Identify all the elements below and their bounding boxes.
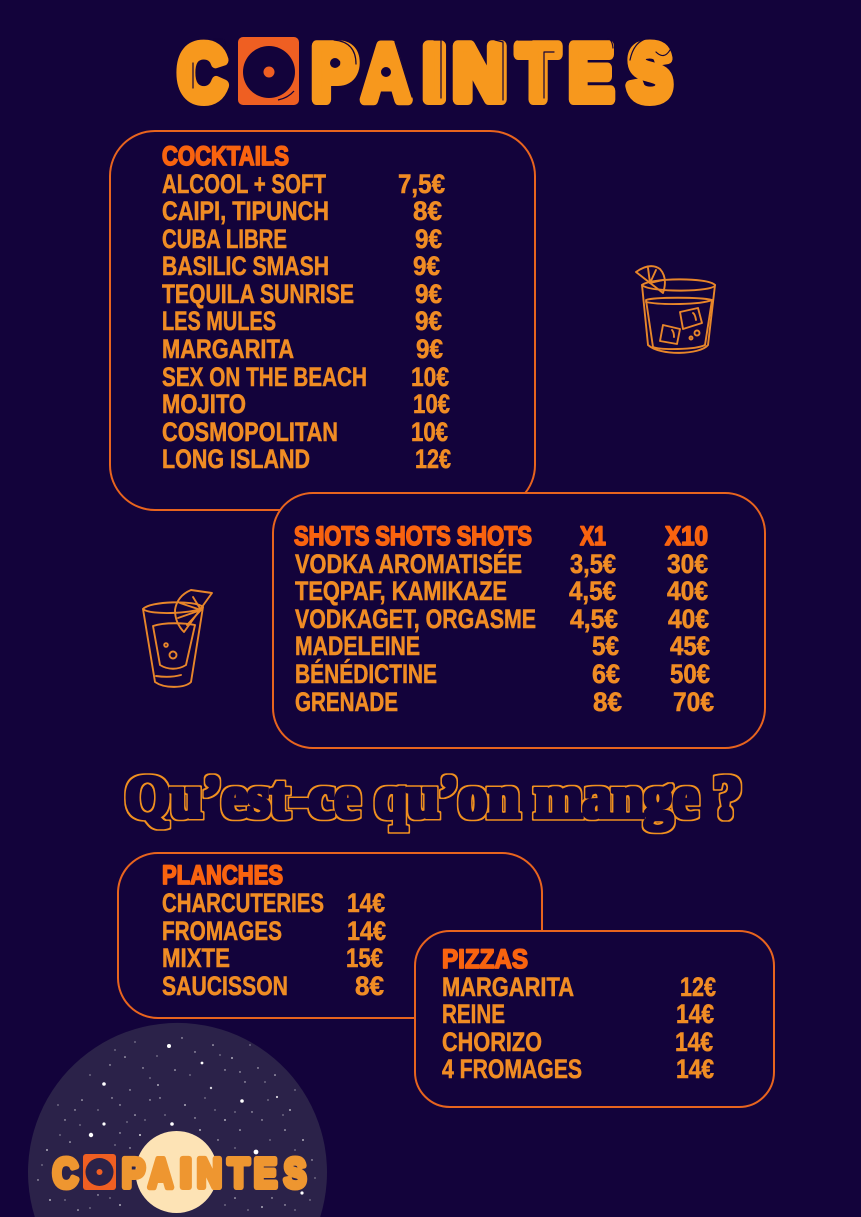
logo: small Copaintes: T	[228, 1151, 249, 1197]
planches prices: 8€	[355, 971, 384, 1001]
cocktail prices: 9€	[415, 279, 442, 309]
logo: Copaintes header: E	[569, 29, 613, 117]
pizza prices: 14€	[676, 999, 714, 1029]
logo: Copaintes header: C	[178, 29, 226, 117]
logo: small Copaintes: C	[53, 1151, 78, 1197]
pizza names: CHORIZO	[442, 1027, 542, 1057]
logo: small Copaintes	[53, 1150, 306, 1197]
shot prices x10: 50€	[670, 659, 710, 689]
moon	[136, 1131, 218, 1213]
cocktail names: CAIPI, TIPUNCH	[162, 196, 329, 226]
cocktail names: SEX ON THE BEACH	[162, 362, 367, 392]
cocktail prices: 9€	[415, 224, 442, 254]
shot prices x10: 30€	[667, 549, 708, 579]
shot prices x1: 6€	[592, 659, 620, 689]
shot names: MADELEINE	[295, 631, 420, 661]
pizza names	[442, 972, 582, 1084]
cocktail prices: 10€	[411, 362, 449, 392]
logo: Copaintes header: S	[628, 30, 672, 117]
cocktail names: TEQUILA SUNRISE	[162, 279, 354, 309]
logo: Copaintes header: N	[453, 30, 507, 117]
cocktail names: COSMOPOLITAN	[162, 417, 338, 447]
logo: Copaintes header: T	[518, 30, 559, 117]
logo: Copaintes header: P	[312, 30, 357, 117]
heading: planches: PLANCHES	[162, 860, 283, 890]
pizza names: 4 FROMAGES	[442, 1054, 582, 1084]
planches names	[162, 888, 324, 1001]
planches names: FROMAGES	[162, 916, 282, 946]
cocktail names: BASILIC SMASH	[162, 251, 329, 281]
shot prices x1: 4,5€	[569, 576, 616, 606]
panel: pizzas	[415, 931, 774, 1107]
heading: shots and column titles: SHOTS SHOTS SHOTS	[294, 521, 532, 551]
pizza names: REINE	[442, 999, 505, 1029]
cocktail prices: 12€	[415, 444, 451, 474]
cocktail prices: 10€	[413, 389, 450, 419]
starry circle badge with small logo	[28, 1023, 327, 1217]
logo: Copaintes header	[178, 29, 672, 117]
planches names: SAUCISSON	[162, 971, 288, 1001]
stars	[37, 1037, 316, 1211]
shot prices x10: 45€	[670, 631, 710, 661]
shot prices x10: 70€	[673, 687, 714, 717]
cocktail names: CUBA LIBRE	[162, 224, 287, 254]
cocktail prices: 10€	[411, 417, 448, 447]
shot prices x10: 40€	[668, 604, 709, 634]
heading: Qu'est-ce qu'on mange ?: Qu’est-ce qu’on mange ?	[125, 764, 742, 830]
panel: shots	[273, 493, 765, 748]
shot prices x10: 40€	[667, 576, 708, 606]
cocktail prices: 7,5€	[398, 169, 445, 199]
logo: small Copaintes: S	[284, 1150, 306, 1196]
icon: cocktail glass with ice and orange slice	[636, 266, 715, 353]
shot prices x1: 4,5€	[570, 604, 618, 634]
cocktail names	[162, 169, 367, 474]
logo: Copaintes header: I	[423, 29, 446, 116]
panel: cocktails	[110, 131, 535, 510]
planches prices: 14€	[347, 888, 385, 918]
cocktail prices: 9€	[416, 334, 443, 364]
cocktail names: MOJITO	[162, 389, 246, 419]
pizza prices: 12€	[680, 972, 716, 1002]
logo: small Copaintes: I	[180, 1150, 192, 1196]
cocktail names: LONG ISLAND	[162, 444, 310, 474]
planches names: MIXTE	[162, 943, 230, 973]
panel: planches	[118, 853, 542, 1018]
planches names: CHARCUTERIES	[162, 888, 324, 918]
pizza names: MARGARITA	[442, 972, 574, 1002]
pizza prices: 14€	[676, 1054, 714, 1084]
planches prices: 15€	[346, 943, 383, 973]
cocktail prices: 8€	[413, 196, 442, 226]
shot names	[295, 549, 536, 717]
logo: small Copaintes: N	[197, 1151, 222, 1197]
cocktail prices: 9€	[415, 306, 442, 336]
cocktail prices	[398, 169, 451, 474]
logo: Copaintes header: A	[363, 30, 410, 117]
pizza prices	[675, 972, 716, 1084]
shot prices x1: 3,5€	[570, 549, 616, 579]
cocktail names: MARGARITA	[162, 334, 294, 364]
shot names: GRENADE	[295, 687, 398, 717]
logo: small Copaintes: E	[254, 1151, 277, 1197]
shot prices x10	[667, 549, 714, 717]
shot prices x1	[569, 549, 622, 717]
logo: small Copaintes: A	[148, 1150, 173, 1196]
heading: shots and column titles: X1	[580, 521, 606, 551]
logo: small Copaintes: P	[122, 1151, 145, 1197]
planches prices: 14€	[347, 916, 386, 946]
heading: pizzas: PIZZAS	[442, 944, 528, 974]
pizza prices: 14€	[675, 1027, 713, 1057]
shot prices x1: 8€	[593, 687, 622, 717]
cocktail names: ALCOOL + SOFT	[162, 169, 326, 199]
planches prices	[346, 888, 386, 1001]
shot names: VODKAGET, ORGASME	[295, 604, 536, 634]
cocktail names: LES MULES	[162, 306, 276, 336]
cocktail prices: 9€	[413, 251, 440, 281]
shot names: TEQPAF, KAMIKAZE	[295, 576, 507, 606]
shot prices x1: 5€	[592, 631, 619, 661]
icon: shot glass with orange slice	[143, 590, 212, 687]
heading: shots and column titles: X10	[665, 521, 708, 551]
heading: cocktails: COCKTAILS	[162, 141, 289, 171]
shot names: VODKA AROMATISÉE	[295, 549, 522, 579]
heading: shots and column titles	[294, 521, 708, 551]
shot names: BÉNÉDICTINE	[295, 659, 437, 689]
